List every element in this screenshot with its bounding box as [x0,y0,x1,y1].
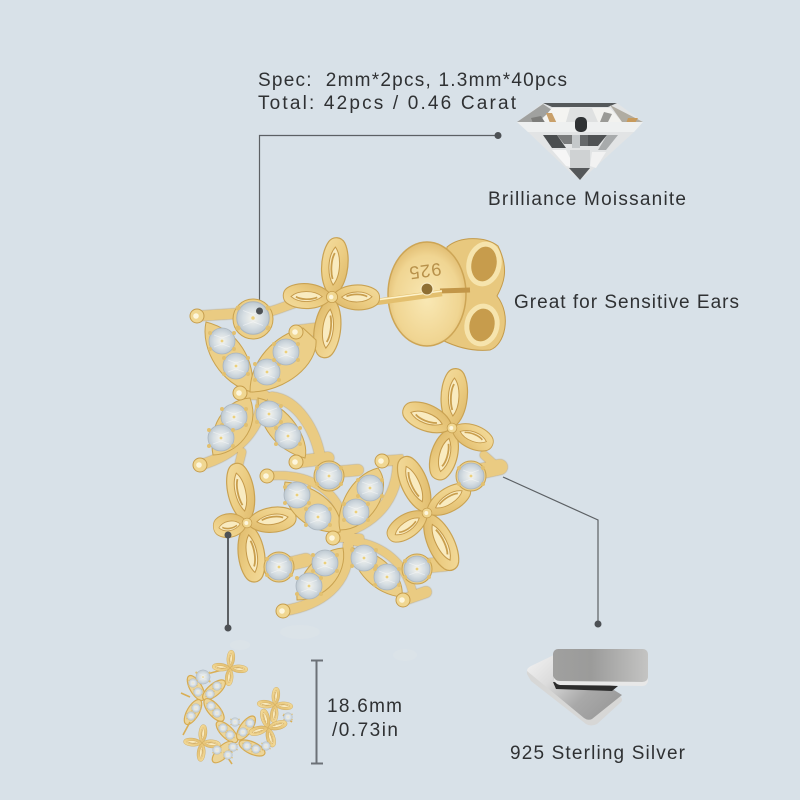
dimension label: /0.73in [332,720,398,741]
leader dot on main stone [256,308,263,314]
leaves with stones [205,299,486,600]
leader line: flower to mini earring [224,532,232,632]
flower: left lower [212,461,298,584]
earring post and backing [376,239,505,350]
dimension bracket [311,660,323,764]
dimension label: 18.6mm [327,696,402,717]
leader line: silver [503,477,602,628]
flower: right upper [399,368,497,483]
spec text: Total: 42pcs / 0.46 Carat [258,93,517,114]
heading: Brilliance Moissanite: Brilliance Moissanite [488,189,686,210]
label: 925 Sterling Silver: 925 Sterling Silver [510,743,686,764]
icon: silver bars [527,649,648,726]
leader line: gem to spec [260,132,502,311]
mini flat-view earring [181,650,294,766]
stamp: 925: 925 [407,259,443,283]
flower: right lower [382,452,475,575]
stones [207,302,485,599]
flower: top [283,237,380,360]
label: Great for Sensitive Ears: Great for Sensitive Ears [514,292,739,313]
icon: moissanite diamond [517,103,643,180]
balls [190,309,410,618]
spec text: Spec: 2mm*2pcs, 1.3mm*40pcs [258,70,567,91]
earring gold frame [197,296,500,611]
spec text [258,70,567,114]
dimension label [327,696,402,741]
faint reflection [230,625,417,661]
